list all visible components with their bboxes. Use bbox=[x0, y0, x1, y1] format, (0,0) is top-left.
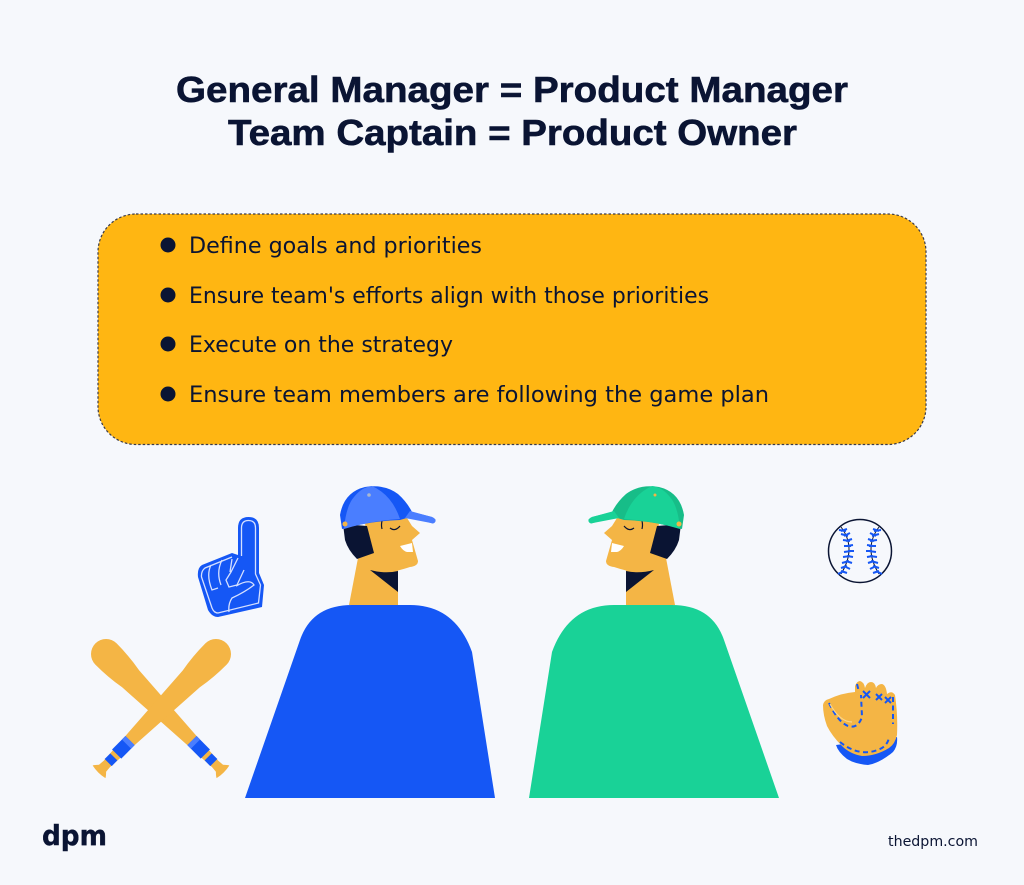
icon: foam finger bbox=[198, 517, 264, 617]
body bbox=[529, 605, 779, 798]
smile bbox=[400, 543, 413, 552]
website label: thedpm.com bbox=[888, 834, 978, 850]
figure: green team captain bbox=[529, 486, 779, 798]
title bbox=[176, 69, 848, 153]
logo: dpm: dpm bbox=[42, 819, 107, 852]
neck bbox=[349, 540, 398, 605]
title: General Manager = Product Manager bbox=[176, 69, 848, 110]
body bbox=[245, 605, 495, 798]
cap bbox=[588, 486, 684, 529]
head bbox=[604, 518, 659, 572]
hair bbox=[650, 524, 681, 559]
icon: baseball glove bbox=[823, 681, 897, 765]
bat left to right bbox=[85, 633, 234, 783]
smile bbox=[611, 543, 624, 552]
title: Team Captain = Product Owner bbox=[228, 112, 797, 153]
bat right to left bbox=[88, 633, 237, 783]
eye bbox=[624, 521, 642, 530]
icon: crossed baseball bats bbox=[85, 633, 237, 783]
figure: blue general manager bbox=[245, 486, 495, 798]
panel: responsibilities list bbox=[98, 214, 926, 444]
neck bbox=[626, 540, 675, 605]
bullet item 4: Ensure team members are following the game plan bbox=[189, 383, 769, 408]
eye bbox=[382, 521, 400, 530]
bullet item 2: Ensure team's efforts align with those priorities bbox=[189, 284, 709, 309]
bullet item 1: Define goals and priorities bbox=[189, 234, 482, 259]
head bbox=[365, 518, 420, 572]
bullet item 3: Execute on the strategy bbox=[189, 333, 453, 358]
collar shadow bbox=[626, 570, 654, 592]
hair bbox=[343, 524, 374, 559]
cap bbox=[340, 486, 436, 529]
icon: baseball bbox=[828, 520, 892, 582]
collar shadow bbox=[370, 570, 398, 592]
